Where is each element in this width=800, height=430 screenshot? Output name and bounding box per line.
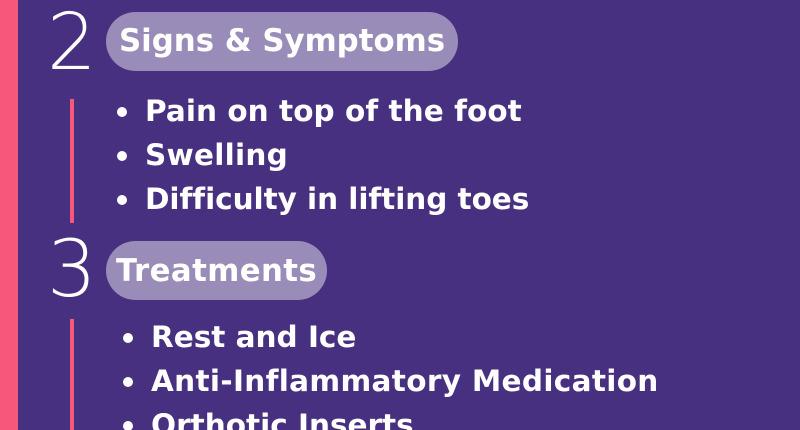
treatments list: Anti-Inflammatory Medication: [151, 364, 659, 398]
symptoms list: Swelling: [145, 138, 288, 172]
heading pill: Treatments: Treatments: [116, 253, 317, 289]
heading pill: Treatments: [106, 241, 327, 300]
treatments list: [123, 320, 659, 430]
symptoms list: [117, 94, 529, 216]
connector line: section 2: [70, 99, 74, 223]
connector line: section 3: [70, 319, 74, 430]
left accent bar: [0, 0, 18, 430]
step number 2: 2: [47, 0, 97, 88]
heading pill: Signs & Symptoms: Signs & Symptoms: [119, 23, 445, 59]
symptoms list: Difficulty in lifting toes: [145, 182, 529, 216]
treatments list: Rest and Ice: [151, 320, 356, 354]
step number 3: 3: [47, 225, 97, 315]
symptoms list: Pain on top of the foot: [145, 94, 522, 128]
heading pill: Signs & Symptoms: [106, 12, 458, 71]
